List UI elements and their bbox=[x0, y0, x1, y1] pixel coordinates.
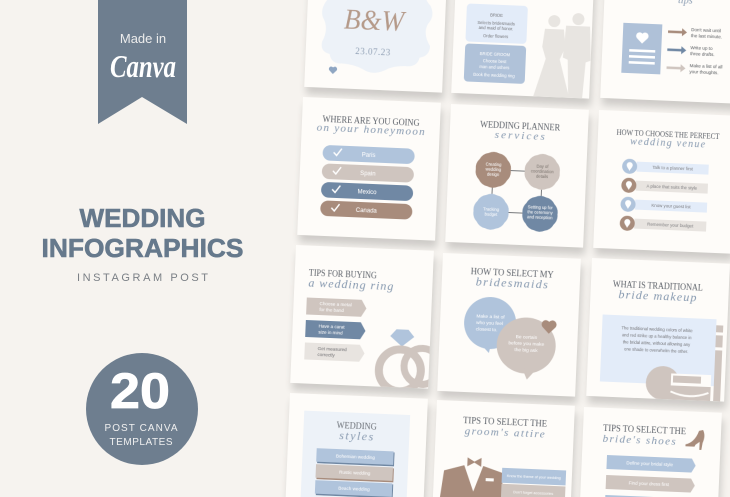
text panel: The traditional wedding colors of white bbox=[621, 325, 693, 333]
text panel: the bridal attire, without allowing any bbox=[623, 339, 691, 347]
destination pills: Canada bbox=[356, 208, 378, 215]
diagram: service cycle: the ceremony bbox=[527, 209, 554, 215]
date card shape bbox=[320, 0, 434, 75]
box: groom: Choose best bbox=[483, 58, 507, 64]
heading script: a wedding ring bbox=[308, 276, 394, 293]
box: groom bbox=[464, 43, 526, 84]
heading script: bride makeup bbox=[618, 287, 697, 304]
icon: makeup set bbox=[645, 322, 723, 409]
panel: buying a wedding ring bbox=[290, 245, 445, 396]
panel: save the date bbox=[304, 0, 450, 100]
destination pills bbox=[320, 145, 415, 220]
panel: bride and groom duties bbox=[451, 0, 597, 106]
silhouette: couple bbox=[533, 11, 593, 99]
heading script: bride's shoes bbox=[602, 433, 676, 448]
arrows and tips: three drafts. bbox=[690, 51, 715, 57]
badge: 20 post canva templates: TEMPLATES bbox=[110, 437, 173, 448]
attire bars: Know the theme of your wedding bbox=[507, 473, 561, 480]
box: bride bbox=[465, 3, 528, 44]
box: groom: BRIDE GROOM bbox=[480, 51, 511, 57]
heading: TIPS FOR BUYING bbox=[309, 268, 377, 280]
speech bubble: right: the big ask bbox=[514, 347, 538, 354]
panel: bride's shoes bbox=[578, 407, 724, 497]
arrow tags: Get measured bbox=[318, 346, 347, 352]
heading script: bridesmaids bbox=[476, 274, 548, 291]
heading script: services bbox=[494, 129, 545, 143]
text panel bbox=[600, 314, 717, 386]
speech bubble: right bbox=[495, 316, 557, 381]
main title bbox=[42, 205, 243, 263]
arrows and tips bbox=[666, 26, 724, 75]
box: groom: man and ushers bbox=[479, 64, 509, 70]
speech bubble: right: Be certain bbox=[516, 334, 538, 341]
panel: wedding styles bbox=[284, 393, 430, 497]
ribbon badge: Made in Canva bbox=[98, 0, 187, 124]
main title: INFOGRAPHICS bbox=[42, 235, 243, 263]
icon: tuxedo bbox=[439, 456, 506, 497]
text panel: and red strike up a healthy balance in bbox=[622, 332, 692, 340]
diagram: service cycle: budget bbox=[484, 212, 498, 217]
panel: selecting bridesmaids bbox=[437, 253, 583, 404]
icon: heart bbox=[541, 320, 557, 334]
badge: 20 post canva templates bbox=[86, 353, 198, 465]
diagram: service cycle: Creating bbox=[485, 162, 502, 167]
diagram: service cycle: design bbox=[487, 172, 500, 177]
text panel: one shade to overwhelm the other. bbox=[624, 346, 688, 354]
list of venue tips: A place that suits the style bbox=[646, 184, 698, 191]
badge: 20 post canva templates: POST CANVA bbox=[104, 423, 178, 434]
panel: traditional bride makeup bbox=[586, 258, 730, 410]
ribbon badge: Made in Canva: Made in bbox=[120, 31, 166, 46]
diagram: service cycle bbox=[473, 151, 561, 232]
arrows and tips: your thoughts. bbox=[689, 69, 719, 75]
heading: WHAT IS TRADITIONAL bbox=[613, 279, 703, 293]
speech bubble: left: who you feel bbox=[476, 320, 503, 327]
list of venue tips bbox=[619, 159, 709, 234]
destination pills: Paris bbox=[362, 153, 376, 159]
icon: heart bbox=[329, 66, 337, 74]
arrows and tips: Write up to bbox=[690, 45, 713, 51]
panel: choosing a venue bbox=[593, 110, 730, 261]
date: 23.07.23 bbox=[355, 46, 391, 57]
diagram: service cycle: details bbox=[536, 174, 548, 179]
heading: WEDDING PLANNER bbox=[480, 119, 560, 133]
diagram: service cycle: wedding bbox=[485, 167, 502, 172]
arrows and tips: Make a list of all bbox=[690, 63, 723, 69]
list of venue tips: Know your guest list bbox=[651, 203, 692, 209]
shoe tip bars bbox=[605, 455, 696, 497]
diagram: service cycle: Day of bbox=[536, 164, 549, 169]
panel: honeymoon destinations bbox=[297, 97, 443, 248]
style bars: Rustic wedding bbox=[339, 470, 371, 476]
ribbon badge: Made in Canva: Canva bbox=[110, 48, 176, 84]
destination pills: Mexico bbox=[357, 189, 377, 196]
heading: WHERE ARE YOU GOING bbox=[322, 114, 420, 128]
arrows and tips: Don't wait until bbox=[691, 27, 721, 33]
main title: WEDDING bbox=[80, 205, 206, 233]
speech bubble: left: Make a list of bbox=[476, 313, 505, 321]
box: bride: BRIDE bbox=[490, 12, 503, 18]
icon: document with heart bbox=[621, 23, 662, 74]
arrow tags: correctly bbox=[317, 352, 336, 358]
box: bride: and maid of honor. bbox=[479, 25, 513, 31]
panel: writing tips bbox=[600, 0, 730, 111]
diagram: service cycle: coordination bbox=[531, 168, 554, 174]
heading: TIPS TO SELECT THE bbox=[603, 423, 687, 436]
heading: HOW TO SELECT MY bbox=[471, 266, 554, 280]
list of venue tips: Talk to a planner first bbox=[652, 165, 694, 172]
diagram: service cycle: and reception bbox=[527, 214, 553, 220]
subtitle: INSTAGRAM POST bbox=[77, 272, 208, 284]
diagram: service cycle: Setting up for bbox=[528, 204, 553, 210]
speech bubble: left bbox=[463, 296, 517, 354]
speech bubble: right: before you make bbox=[508, 340, 545, 348]
shoe tip bars: Define your bridal style bbox=[626, 460, 674, 467]
heading script: styles bbox=[339, 428, 374, 444]
panel: groom's attire bbox=[431, 400, 577, 497]
style bars: Bohemian wedding bbox=[336, 453, 375, 460]
attire bars: Don't forget accessories bbox=[513, 489, 553, 496]
style bars: Beach wedding bbox=[338, 486, 370, 492]
list of venue tips: Remember your budget bbox=[647, 222, 694, 229]
arrow tags bbox=[304, 297, 367, 362]
arrows and tips: the last minute. bbox=[691, 33, 722, 39]
arrow tags: for the band bbox=[319, 307, 344, 313]
panel: wedding planner services bbox=[445, 104, 591, 255]
diagram: service cycle: Tracking bbox=[483, 206, 500, 212]
attire bars bbox=[501, 468, 566, 497]
heading: TIPS TO SELECT THE bbox=[463, 415, 548, 429]
initials: B&W bbox=[343, 4, 407, 38]
icon: high heel shoe bbox=[685, 429, 705, 450]
box: bride: Selects bridesmaids bbox=[477, 20, 515, 26]
destination pills: Spain bbox=[360, 171, 376, 178]
box: bride: Order flowers bbox=[483, 33, 508, 39]
heading script: groom's attire bbox=[464, 425, 545, 441]
heading script: on your honeymoon bbox=[316, 122, 425, 138]
heading: WEDDING bbox=[336, 420, 377, 432]
arrow tags: Have a carat bbox=[319, 324, 345, 330]
heading script: wedding venue bbox=[630, 136, 706, 150]
icon: diamond rings bbox=[374, 329, 430, 388]
badge: 20 post canva templates: 20 bbox=[110, 363, 170, 419]
style bars bbox=[315, 448, 395, 497]
shoe tip bars: Find your dress first bbox=[629, 480, 670, 487]
arrow tags: Choose a metal bbox=[319, 301, 352, 307]
box: groom: Book the wedding ring bbox=[473, 72, 515, 79]
speech bubble: left: closest to. bbox=[476, 326, 498, 333]
arrow tags: size in mind bbox=[318, 330, 343, 336]
